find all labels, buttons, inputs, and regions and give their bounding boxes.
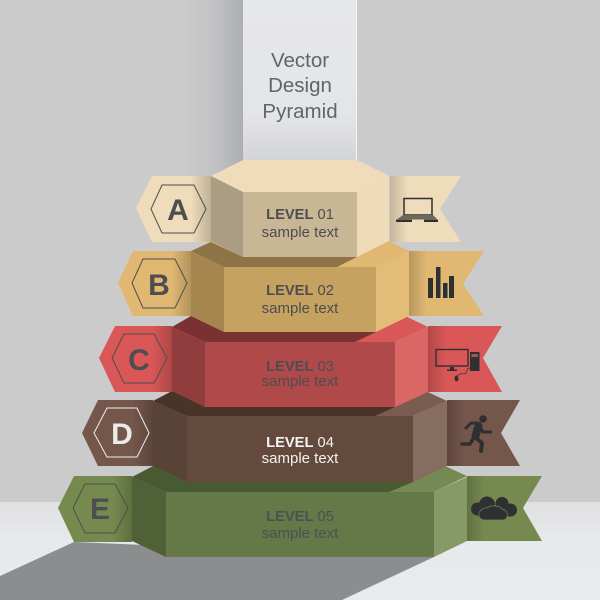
block E — [132, 461, 467, 492]
level 02 tier: sample text — [262, 300, 339, 317]
title panel: Design — [268, 74, 332, 97]
level 05 label: LEVEL 05 — [266, 509, 334, 525]
block A — [211, 160, 389, 192]
left ribbon E: E — [90, 493, 110, 526]
title panel: Pyramid — [262, 100, 338, 123]
level 04 tier: sample text — [262, 450, 339, 467]
level 03 label: LEVEL 03 — [266, 359, 334, 375]
level 05 tier: sample text — [262, 525, 339, 542]
level 03 tier — [99, 311, 502, 407]
left ribbon E — [58, 476, 132, 542]
right ribbon B with bar chart icon — [409, 251, 484, 316]
title: Vector — [271, 49, 329, 72]
level 01 tier: sample text — [262, 224, 339, 241]
right ribbon D with runner icon — [447, 400, 520, 466]
level 04 label: LEVEL 04 — [266, 435, 334, 451]
wall shading left of panel — [0, 0, 243, 176]
level 02 label: LEVEL 02 — [266, 283, 334, 299]
left ribbon A — [136, 176, 211, 242]
left ribbon C: C — [128, 344, 150, 377]
left ribbon D: D — [111, 418, 133, 451]
block D — [153, 385, 447, 416]
level 05 tier — [58, 461, 542, 557]
level 04 tier — [82, 385, 520, 482]
left ribbon C — [99, 326, 172, 392]
right ribbon C with computer icon — [428, 326, 502, 392]
floor shadow — [0, 542, 434, 600]
level 03 tier: sample text — [262, 373, 339, 390]
right ribbon E with cloud icon — [467, 476, 542, 541]
level 02 tier — [118, 235, 484, 332]
block B — [191, 235, 409, 267]
right ribbon A with laptop icon — [390, 176, 461, 242]
left ribbon A: A — [167, 194, 189, 227]
level 01 label: LEVEL 01 — [266, 207, 334, 223]
left ribbon B — [118, 251, 191, 316]
title panel — [243, 0, 357, 162]
left ribbon B: B — [148, 269, 170, 302]
block C — [172, 311, 428, 342]
level 01 tier — [136, 160, 461, 257]
floor — [0, 502, 600, 600]
left ribbon D — [82, 400, 153, 466]
